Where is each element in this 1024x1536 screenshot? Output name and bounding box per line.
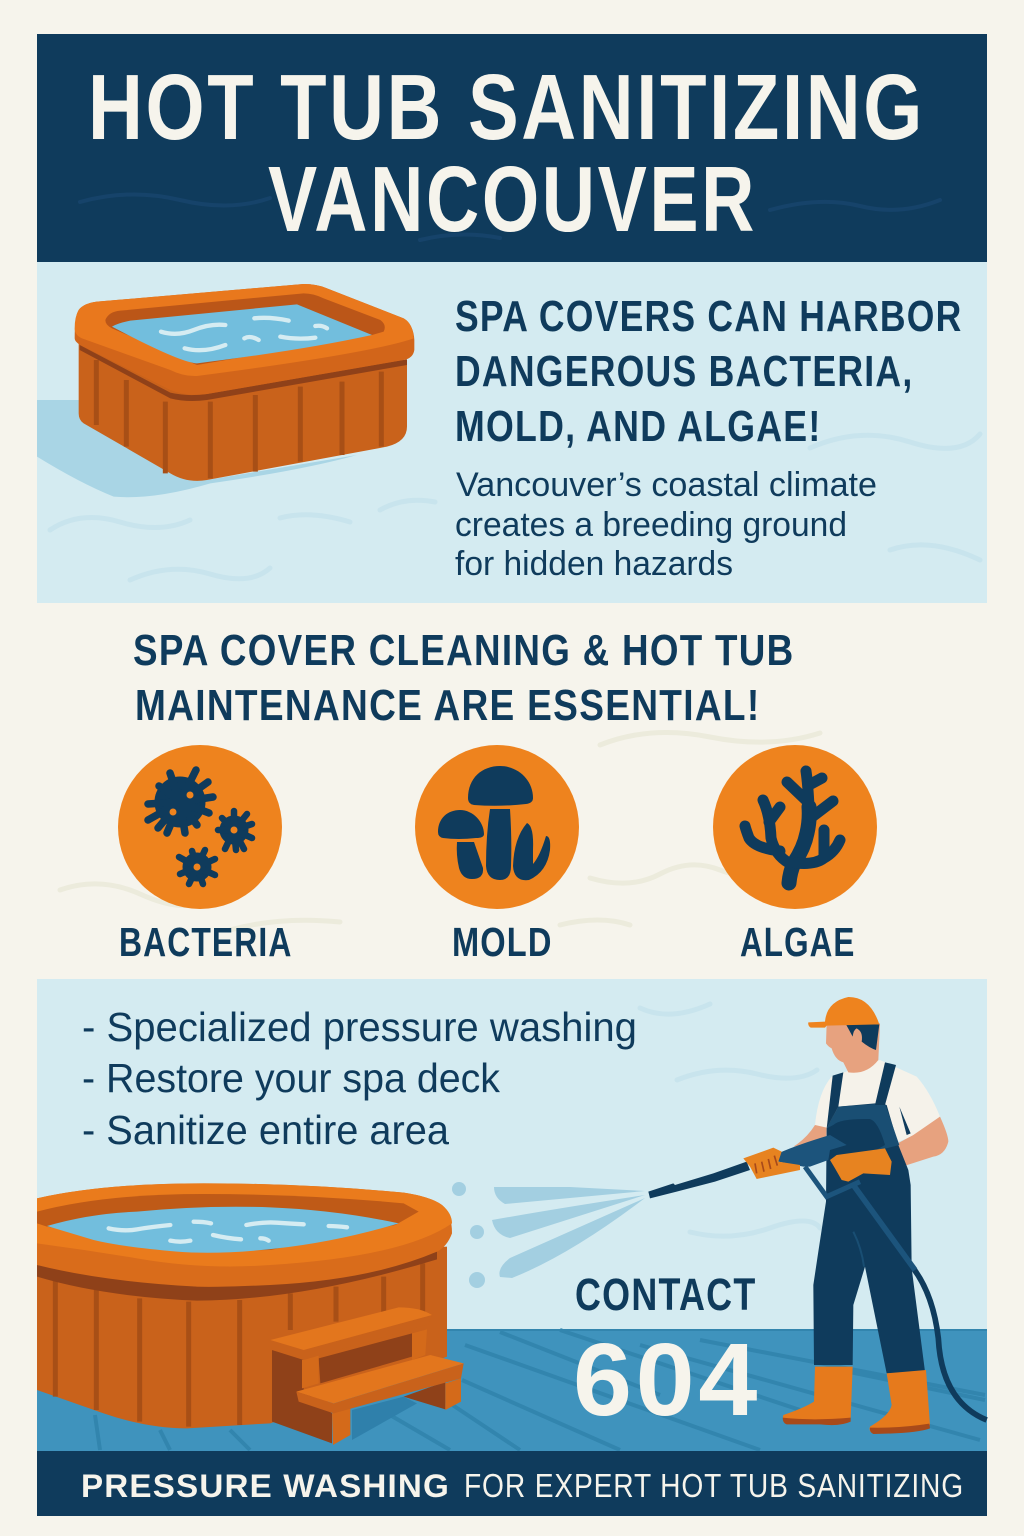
heading: spa cover warning: [455, 292, 962, 451]
panel: spa cover warning: [37, 262, 987, 603]
pressure washer: [648, 1162, 750, 1198]
text: climate description: Vancouver’s coastal climate: [456, 466, 877, 504]
footer banner: [37, 1451, 987, 1516]
panel: service and contact: [37, 979, 987, 1451]
icon: bacteria: [118, 745, 282, 909]
contact number: 604: [573, 1322, 761, 1437]
text: climate description: creates a breeding ground: [455, 506, 847, 544]
footer banner: PRESSURE WASHING: [81, 1468, 450, 1504]
icon: square hot tub: [37, 284, 414, 497]
label: bacteria: BACTERIA: [119, 919, 292, 965]
deck: [37, 1330, 987, 1451]
text: service list: - Specialized pressure washing: [82, 1004, 637, 1050]
skin: arms: [793, 1125, 827, 1147]
text: service list: - Sanitize entire area: [82, 1107, 449, 1153]
overalls: [813, 1103, 925, 1373]
text: climate description: [455, 466, 877, 583]
steps: [270, 1307, 464, 1445]
text: service list: - Restore your spa deck: [82, 1055, 500, 1101]
heading: maintenance essential: MAINTENANCE ARE ESSENTIAL!: [135, 681, 760, 730]
text: service list: [82, 1004, 637, 1153]
heading: spa cover warning: DANGEROUS BACTERIA,: [455, 347, 914, 396]
skin: head and neck: [826, 1023, 880, 1073]
label: algae: ALGAE: [740, 919, 856, 965]
panel: title banner: [37, 34, 987, 262]
icon: water spray: [452, 1182, 645, 1288]
boots: [783, 1367, 853, 1424]
label: mold: MOLD: [452, 919, 552, 965]
panel: hazards: [60, 626, 877, 965]
heading: maintenance essential: SPA COVER CLEANING & HOT TUB: [133, 626, 794, 675]
hose: [913, 1268, 987, 1420]
icon: algae: [713, 745, 877, 909]
rear glove: [830, 1148, 892, 1182]
hair: [846, 1024, 879, 1050]
front glove: [743, 1148, 800, 1179]
heading: maintenance essential: [133, 626, 794, 730]
shirt: [815, 1060, 940, 1142]
text: climate description: for hidden hazards: [455, 545, 733, 583]
icon: round hot tub with steps: [37, 1183, 464, 1445]
heading: spa cover warning: MOLD, AND ALGAE!: [455, 402, 822, 451]
icon: mold: [415, 745, 579, 909]
title line two: VANCOUVER: [268, 147, 757, 251]
contact label: CONTACT: [575, 1269, 756, 1320]
icon: worker with pressure washer: [648, 997, 987, 1434]
hat: [808, 997, 879, 1028]
